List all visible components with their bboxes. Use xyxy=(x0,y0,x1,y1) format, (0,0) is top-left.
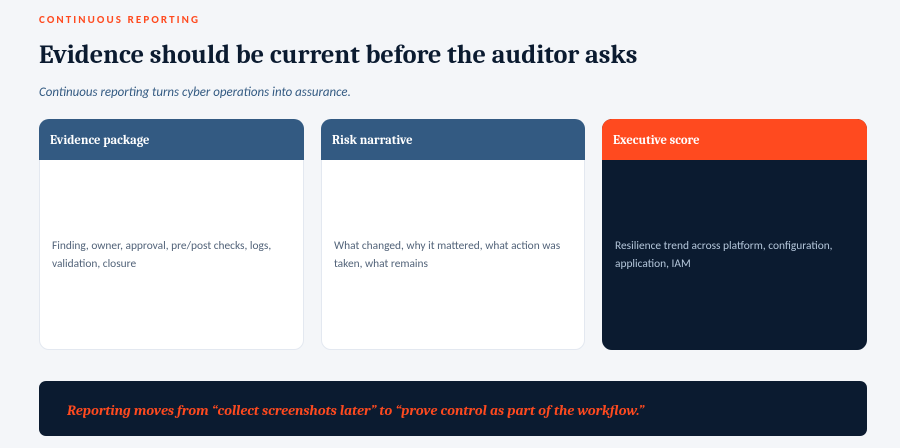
callout banner: Reporting moves from “collect screenshots later” to “prove control as part of the workflow.” xyxy=(67,402,644,419)
panel: evidence package xyxy=(39,119,304,350)
title: Evidence should be current before the auditor asks xyxy=(39,39,637,70)
callout banner xyxy=(39,381,867,436)
panel heading: evidence package xyxy=(39,119,304,160)
panel heading: risk narrative: Risk narrative xyxy=(332,134,413,148)
panel heading: evidence package: Evidence package xyxy=(50,134,150,148)
panel: risk narrative xyxy=(321,119,585,350)
panel heading: executive score xyxy=(602,119,867,160)
panel heading: risk narrative xyxy=(321,119,585,160)
subtitle: Continuous reporting turns cyber operations into assurance. xyxy=(39,85,351,100)
panel text: evidence package: Finding, owner, approval, pre/post checks, logs, validation, closure xyxy=(52,239,271,271)
panel text: risk narrative: What changed, why it mattered, what action was taken, what remains xyxy=(334,239,560,271)
panel text: executive score: Resilience trend across platform, configuration, application, IAM xyxy=(615,239,833,271)
panel heading: executive score: Executive score xyxy=(613,134,700,148)
panel: executive score xyxy=(602,119,867,350)
eyebrow label: CONTINUOUS REPORTING xyxy=(39,13,200,26)
